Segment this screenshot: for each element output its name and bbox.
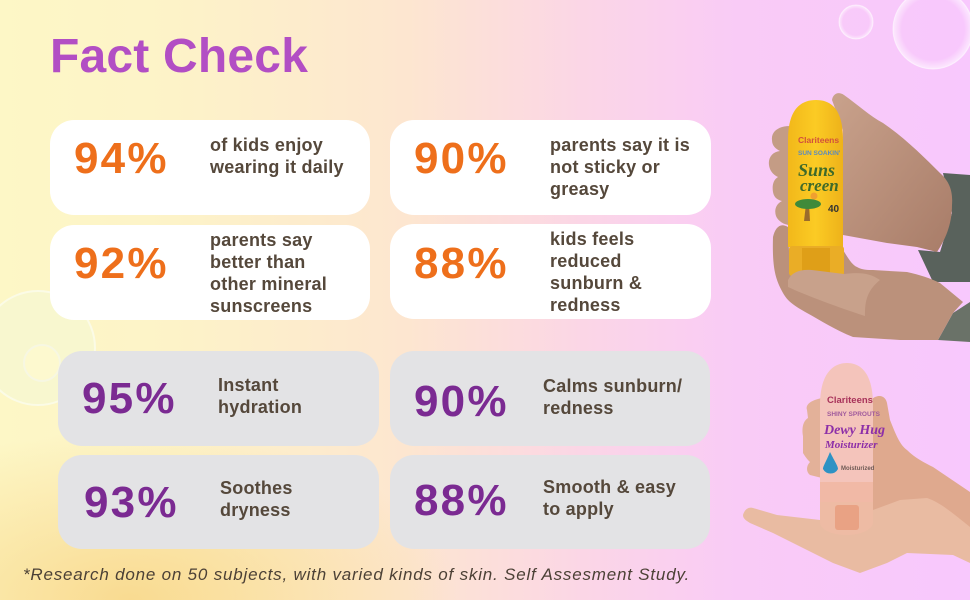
card: 92%: better than <box>210 252 306 272</box>
card: 88% reduced sunburn <box>390 224 711 319</box>
card: 93%: Soothes <box>220 478 293 498</box>
product: moisturizer in hand: SHINY SPROUTS <box>827 411 881 418</box>
card: 88% smooth: 88% <box>414 476 509 525</box>
card: 92%: 92% <box>74 239 169 288</box>
card: 88% smooth <box>390 455 710 549</box>
card: 88% reduced sunburn: reduced <box>550 251 622 271</box>
palm <box>743 498 970 573</box>
card: 95%: Instant <box>218 375 279 395</box>
card: 92%: parents say <box>210 230 313 250</box>
thumb <box>788 270 880 316</box>
card: 95%: hydration <box>218 397 302 417</box>
product: moisturizer in hand: Dewy Hug <box>823 423 885 438</box>
product: moisturizer in hand: Clariteens <box>827 395 873 406</box>
product: sunscreen in hands: Suns <box>798 160 835 180</box>
card: 92%: other mineral <box>210 274 327 294</box>
card: 95%: 95% <box>82 374 177 423</box>
card: 93% <box>58 455 379 549</box>
card: 88% reduced sunburn: sunburn & <box>550 273 642 293</box>
card: 90% calms: redness <box>543 398 614 418</box>
card: 88% smooth: to apply <box>543 499 614 519</box>
card: 95% <box>58 351 379 446</box>
card: 93%: dryness <box>220 500 291 520</box>
card: 90% not sticky: 90% <box>414 134 509 183</box>
title: Fact Check <box>50 30 308 83</box>
product: sunscreen in hands: creen <box>800 176 839 195</box>
card: 94%: wearing it daily <box>210 157 344 177</box>
bottle <box>788 100 843 247</box>
sleeves <box>918 173 970 282</box>
card: 90% calms: Calms sunburn/ <box>543 376 682 396</box>
fingers <box>803 398 822 478</box>
decorative bubbles: top right <box>838 0 970 70</box>
card: 90% calms <box>390 351 710 446</box>
card: 94%: 94% <box>74 134 169 183</box>
card: 90% not sticky: not sticky or <box>550 157 660 177</box>
card: 90% not sticky: greasy <box>550 179 609 199</box>
card: 90% not sticky: parents say it is <box>550 135 690 155</box>
lower hand <box>773 225 963 340</box>
footnote: *Research done on 50 subjects, with varied kinds of skin. Self Assesment Study. <box>23 565 690 584</box>
product: sunscreen in hands <box>768 93 970 342</box>
left fingers <box>769 126 790 225</box>
card: 92%: sunscreens <box>210 296 312 316</box>
back hand and thumb <box>870 396 970 540</box>
card: 88% reduced sunburn: redness <box>550 295 621 315</box>
product: moisturizer in hand: Moisturized <box>841 466 875 472</box>
product: moisturizer in hand: Moisturizer <box>824 439 878 451</box>
product: sunscreen in hands: 40 <box>828 204 840 215</box>
card: 90% not sticky <box>390 120 711 215</box>
product: sunscreen in hands: SUN SOAKIN' <box>798 150 841 157</box>
card: 92% <box>50 225 370 320</box>
decorative bubble: left <box>0 290 96 406</box>
card: 88% reduced sunburn: 88% <box>414 239 509 288</box>
card: 93%: 93% <box>84 478 179 527</box>
card: 94%: of kids enjoy <box>210 135 323 155</box>
product: moisturizer in hand <box>743 363 970 573</box>
bottle <box>820 363 873 483</box>
card: 90% calms: 90% <box>414 377 509 426</box>
card: 94% <box>50 120 370 215</box>
product: sunscreen in hands: Clariteens <box>798 135 839 145</box>
back hand <box>832 93 952 252</box>
card: 88% reduced sunburn: kids feels <box>550 229 634 249</box>
card: 88% smooth: Smooth & easy <box>543 477 676 497</box>
